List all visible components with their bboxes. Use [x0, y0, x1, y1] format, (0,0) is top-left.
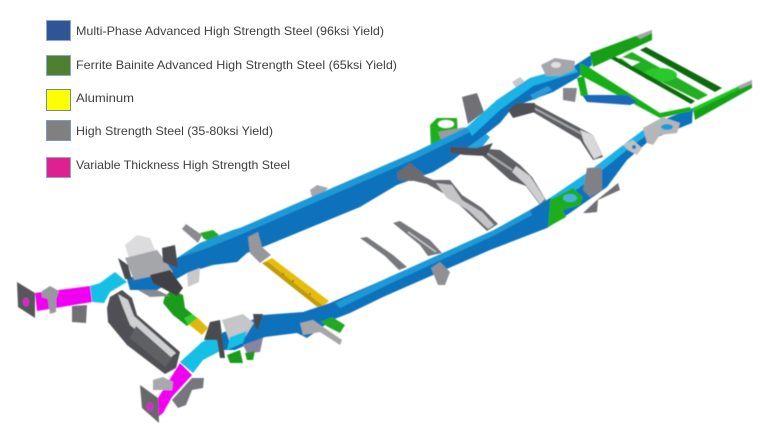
right rail cyan section: [180, 333, 222, 373]
gray dome bracket, front left: [512, 77, 526, 89]
right rail magenta section: [158, 363, 192, 417]
gray front upper knuckle left: [541, 58, 575, 76]
gray damper: [563, 88, 577, 102]
aluminum crossmember: [262, 258, 329, 309]
rear end plate left: [17, 282, 35, 318]
left rail magenta section: [35, 286, 92, 311]
crossmember heads over left rail: [397, 103, 535, 181]
legend item: variable thickness steel: [46, 158, 290, 178]
legend item: multi-phase steel: [46, 20, 384, 40]
right frame rail (blue): [222, 108, 693, 350]
green rail bracket, front left: [430, 118, 465, 148]
left frame rail (blue): [127, 55, 592, 290]
gray stub rear right: [300, 320, 342, 345]
gray crossmember: rear arch: [410, 170, 498, 231]
green stub on rear left: [200, 230, 219, 241]
gray under front right rail: [583, 183, 620, 213]
legend: [46, 20, 397, 178]
gray stub member left: [360, 237, 407, 270]
green link: [577, 76, 588, 96]
gray bracket on crossmember: [248, 232, 271, 263]
spring hanger left: [42, 286, 59, 314]
left rail cyan section: [90, 272, 127, 303]
legend item: variable thickness steel: Variable Thickness High Strength Steel: [76, 158, 290, 172]
gray tower right: [583, 167, 602, 197]
legend item: aluminum: Aluminum: [76, 91, 134, 105]
green rear crossmember: [163, 290, 197, 326]
legend item: multi-phase steel: Multi-Phase Advanced High Strength Steel (96ksi Yield): [76, 24, 384, 38]
legend item: aluminum: [46, 90, 134, 110]
aluminum rear crossmember: [187, 317, 208, 335]
rear end plate right: [140, 385, 159, 423]
purple-gray lower part: [243, 338, 263, 353]
gray crossmember: middle arch: [477, 148, 546, 205]
green lower bracket: [227, 350, 255, 363]
green front frame section: [580, 30, 752, 120]
gray rear arch member: [107, 290, 180, 374]
green front suspension bracket right: [548, 188, 583, 227]
legend item: ferrite bainite steel: Ferrite Bainite Advanced High Strength Steel (65ksi Yield): [76, 58, 397, 72]
blue front control arm: [582, 95, 637, 105]
gray front knuckle right: [643, 117, 680, 145]
gray side stub rear left: [182, 224, 202, 243]
gray tower, front left: [462, 93, 484, 124]
gray crossmember: front arch: [530, 103, 603, 160]
lower bracket right: [172, 378, 204, 408]
legend item: ferrite bainite steel: [46, 56, 397, 76]
spring hanger right: [153, 377, 173, 390]
gray bracket under right rail: [431, 262, 450, 285]
gray knuckle small: [623, 140, 642, 155]
gray stub member right: [393, 221, 442, 256]
lower bracket left: [72, 305, 87, 323]
green bracket rear right: [320, 317, 345, 333]
legend item: high strength steel: High Strength Steel (35-80ksi Yield): [76, 124, 273, 138]
rear shock tower left: [118, 235, 200, 297]
rear shock tower right: [204, 314, 263, 358]
legend item: high strength steel: [46, 120, 273, 140]
gray dome bracket on left rail: [310, 185, 328, 197]
